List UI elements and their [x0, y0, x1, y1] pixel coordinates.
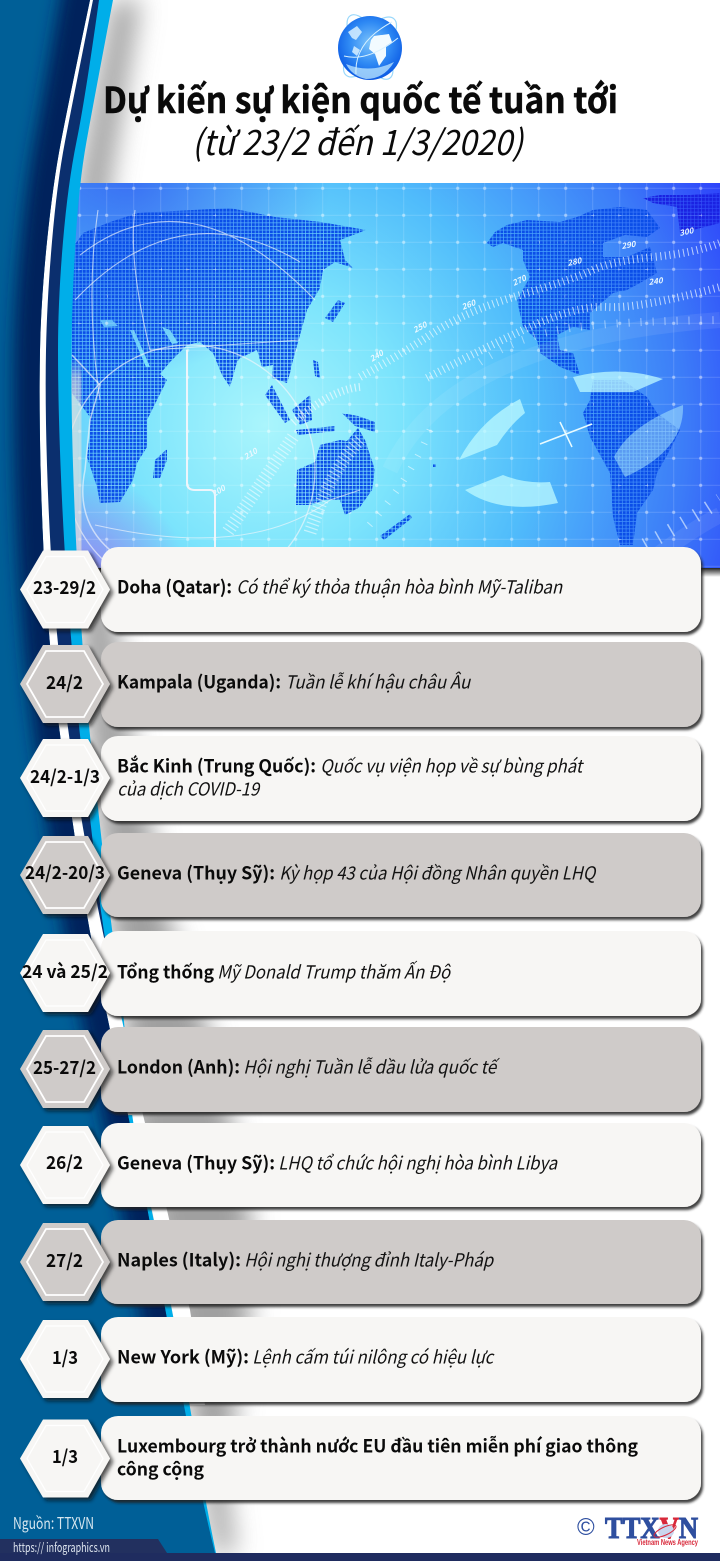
footer bar — [0, 1553, 720, 1561]
card background — [101, 1027, 701, 1112]
map: Eurasia and Africa — [66, 208, 366, 503]
event text — [117, 959, 452, 985]
map: South America — [583, 380, 680, 545]
scale numbers: 250 — [411, 319, 430, 336]
card background — [101, 1416, 701, 1500]
event text: Kampala (Uganda): — [117, 669, 281, 695]
event text: Tuần lễ khí hậu châu Âu — [285, 669, 471, 695]
hero image: world map — [60, 183, 720, 595]
event text: Quốc vụ viện họp về sự bùng phát — [320, 753, 584, 779]
event text — [117, 1150, 558, 1176]
panel: row 2 Kampala — [20, 642, 701, 727]
crosshair — [540, 422, 592, 447]
light arc shapes — [459, 371, 683, 507]
scale numbers: 290 — [621, 238, 638, 252]
event text: Lệnh cấm túi nilông có hiệu lực — [252, 1344, 495, 1370]
scale numbers: 210 — [242, 445, 261, 463]
event text: LHQ tổ chức hội nghị hòa bình Libya — [278, 1150, 558, 1176]
card background — [101, 547, 701, 632]
date hexagon — [20, 1320, 110, 1398]
panel: row 4 Geneva — [20, 833, 701, 917]
left swoosh band — [0, 0, 216, 1553]
date hexagon — [20, 1126, 110, 1204]
event text: Luxembourg trở thành nước EU đầu tiên miễn phí giao thông — [117, 1433, 638, 1459]
date hexagon — [20, 1030, 110, 1108]
date hexagon — [20, 645, 110, 723]
event text — [117, 1247, 495, 1273]
scale numbers — [210, 225, 696, 500]
source: Nguồn: TTXVN — [13, 1510, 94, 1534]
swoosh: navy stripe — [0, 0, 128, 1115]
logo: TTXVN: TTXVN — [605, 1510, 698, 1545]
date: 24/2-1/3 — [30, 763, 100, 789]
panel: row 7 Geneva — [20, 1123, 701, 1207]
event text — [117, 1054, 500, 1080]
event text: Hội nghị thượng đỉnh Italy-Pháp — [244, 1247, 495, 1273]
date: 23-29/2 — [33, 574, 96, 600]
tick scales — [227, 243, 720, 545]
scale numbers: 270 — [511, 272, 529, 289]
panel: row 10 Luxembourg — [20, 1416, 701, 1500]
swoosh: blue base — [0, 0, 215, 1553]
date hexagon — [20, 1420, 110, 1498]
event text — [117, 753, 584, 802]
event text: Geneva (Thụy Sỹ): — [117, 1150, 275, 1176]
event text: Bắc Kinh (Trung Quốc): — [117, 753, 316, 779]
date hexagon — [20, 739, 110, 817]
logo: TTXVN: Vietnam News Agency — [637, 1538, 698, 1547]
event text: Naples (Italy): — [117, 1247, 241, 1273]
card background — [101, 642, 701, 727]
title: Dự kiến sự kiện quốc tế tuần tới — [103, 72, 618, 124]
event text — [117, 860, 598, 886]
swoosh: white stripe — [0, 0, 143, 1115]
date: 24/2 — [46, 669, 83, 695]
event text — [117, 1344, 495, 1370]
event text: Mỹ Donald Trump thăm Ấn Độ — [217, 959, 452, 985]
scale numbers: 240 — [648, 275, 665, 288]
panel: row 1 Doha — [20, 547, 701, 632]
scale numbers: 280 — [566, 255, 584, 269]
scale numbers: 240 — [368, 347, 387, 365]
subtitle: (từ 23/2 đến 1/3/2020) — [192, 115, 525, 166]
date: 25-27/2 — [33, 1054, 96, 1080]
event text: London (Anh): — [117, 1054, 240, 1080]
map: Australia — [296, 428, 375, 515]
copyright symbol: © — [577, 1514, 595, 1541]
scale numbers: 200 — [210, 482, 229, 500]
event text: Hội nghị Tuần lễ dầu lửa quốc tế — [243, 1054, 500, 1080]
date hexagon — [20, 836, 110, 914]
event text — [117, 669, 471, 695]
event text: Doha (Qatar): — [117, 574, 232, 600]
event text: của dịch COVID-19 — [117, 776, 261, 802]
map: Greenland — [643, 193, 720, 233]
event text: New York (Mỹ): — [117, 1344, 249, 1370]
card background — [101, 1123, 701, 1207]
card background — [101, 931, 701, 1016]
card background — [101, 1220, 701, 1304]
event text: công cộng — [117, 1456, 204, 1482]
panel: row 5 Trump — [20, 931, 701, 1016]
panel: row 8 Naples — [20, 1220, 701, 1304]
date: 24/2-20/3 — [25, 859, 105, 885]
footer tab — [0, 1539, 167, 1553]
shadow under hero image — [60, 568, 720, 577]
date: 24 và 25/2 — [22, 958, 108, 984]
date: 1/3 — [52, 1344, 78, 1370]
date: 27/2 — [46, 1247, 83, 1273]
card background — [101, 833, 701, 917]
icon: globe — [335, 8, 405, 86]
date hexagon — [20, 1223, 110, 1301]
event text: Tổng thống — [117, 959, 214, 985]
website: https:// infographics.vn — [13, 1537, 110, 1556]
panel: row 9 New York — [20, 1317, 701, 1402]
event text: Geneva (Thụy Sỹ): — [117, 860, 275, 886]
panel: row 6 London — [20, 1027, 701, 1112]
event text: Kỳ họp 43 của Hội đồng Nhân quyền LHQ — [279, 860, 598, 886]
panel: row 3 Bac Kinh — [20, 736, 701, 821]
event text — [117, 1433, 638, 1482]
date hexagon — [20, 934, 110, 1012]
pale edge shadow on image — [71, 370, 78, 570]
swoosh: cyan stripe — [0, 0, 216, 1553]
card background — [101, 1317, 701, 1402]
map: islands — [153, 290, 436, 540]
globe lines — [72, 210, 360, 560]
date: 26/2 — [46, 1149, 83, 1175]
event text: Có thể ký thỏa thuận hòa bình Mỹ-Taliban — [236, 574, 563, 600]
soft grey shadow beside the swoosh — [71, 0, 250, 1553]
card background — [101, 736, 701, 821]
swoosh: dark inner edge — [40, 0, 172, 1345]
date hexagon — [20, 550, 110, 628]
scale numbers: 260 — [460, 297, 478, 313]
date: 1/3 — [52, 1443, 78, 1469]
scale numbers: 300 — [678, 225, 696, 239]
swoosh: lower white stripe — [128, 1115, 205, 1405]
map: North America — [487, 207, 660, 375]
